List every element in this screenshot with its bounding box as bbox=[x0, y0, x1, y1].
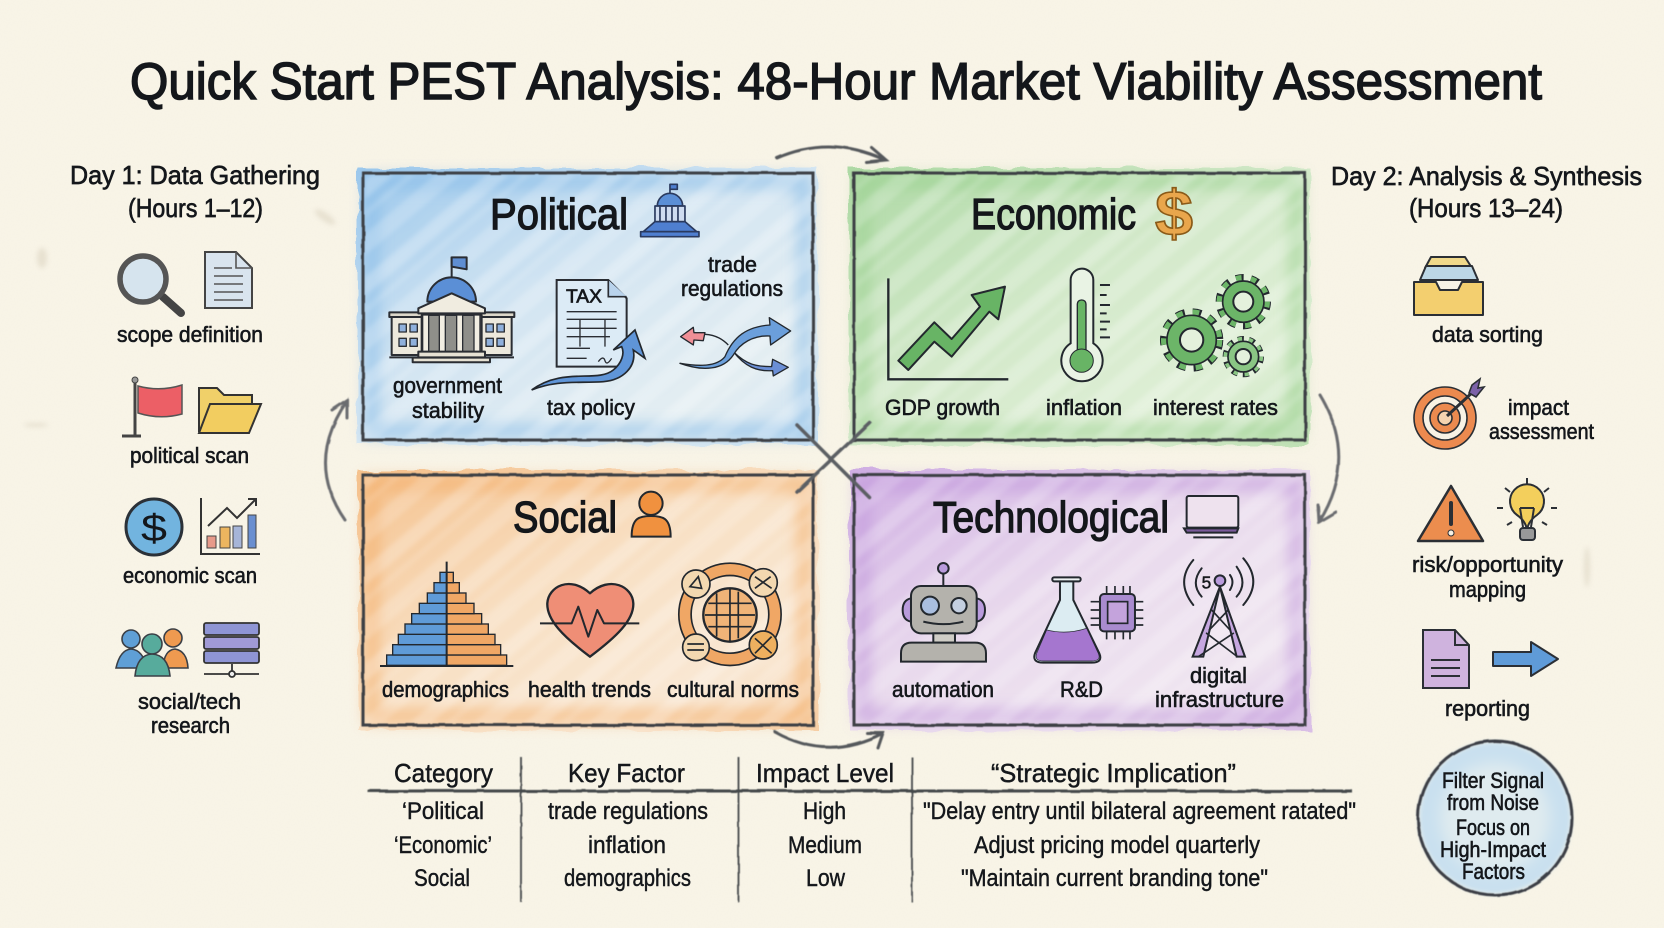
left column: day 1 data gathering bbox=[70, 160, 320, 738]
callout: filter signal from noise bbox=[1418, 741, 1572, 895]
label: trade regulations: regulations bbox=[681, 276, 783, 301]
label: social/tech research: social/tech bbox=[138, 689, 241, 714]
right column: day 2 analysis bbox=[1331, 161, 1642, 721]
icon: blue arrow bbox=[1493, 642, 1558, 676]
icon: government building bbox=[389, 257, 514, 362]
table row: political bbox=[402, 798, 1356, 825]
label: inflation: inflation bbox=[1046, 395, 1122, 420]
icon: warning triangle bbox=[1418, 486, 1483, 541]
table row: political: "Delay entry until bilateral agreement ratated" bbox=[923, 798, 1356, 825]
callout text: Factors bbox=[1462, 859, 1525, 884]
icon: server stack bbox=[204, 623, 259, 677]
table header row: Impact Level bbox=[756, 758, 894, 788]
icon: person bbox=[632, 492, 671, 537]
callout text: Focus on bbox=[1456, 815, 1530, 840]
table row: social bbox=[414, 865, 1268, 892]
icon: gears bbox=[1165, 279, 1266, 373]
label: trade regulations bbox=[681, 252, 783, 301]
table row: social: Low bbox=[806, 865, 846, 892]
label: digital infrastructure: digital bbox=[1190, 663, 1247, 688]
table row: social: Social bbox=[414, 865, 470, 892]
economic border bbox=[854, 173, 1305, 440]
icon: tax document with arrow: TAX bbox=[566, 286, 603, 307]
icon: growth chart bbox=[888, 278, 1008, 379]
cross connector in the centre bbox=[797, 423, 870, 498]
technological wash bbox=[849, 470, 1310, 730]
icon: cultural norms wheel bbox=[682, 569, 777, 661]
icon: population pyramid bbox=[380, 562, 513, 666]
day 1 heading bbox=[70, 160, 320, 223]
label: social/tech research bbox=[138, 689, 241, 738]
political wash bbox=[358, 168, 818, 445]
icon: gold dollar: $ bbox=[1155, 177, 1193, 249]
table row: economic bbox=[394, 832, 1260, 859]
icon: document bbox=[205, 252, 252, 308]
day 2 heading: (Hours 13–24) bbox=[1409, 193, 1563, 223]
table row: political: ‘Political bbox=[402, 798, 484, 825]
label: demographics: demographics bbox=[382, 677, 509, 702]
label: impact assessment: assessment bbox=[1489, 419, 1594, 444]
label: risk/opportunity mapping bbox=[1412, 552, 1563, 602]
callout text: Filter Signal bbox=[1442, 768, 1544, 793]
icon: flask and chip bbox=[1034, 577, 1143, 663]
icon: red flag bbox=[122, 377, 182, 436]
day 1 heading: Day 1: Data Gathering bbox=[70, 160, 320, 190]
icon: 5g tower: 5 bbox=[1202, 572, 1211, 592]
table row: political: High bbox=[803, 798, 846, 825]
icon: report document bbox=[1423, 630, 1469, 688]
label: trade regulations: trade bbox=[708, 252, 757, 277]
icon: 5g tower bbox=[1184, 558, 1253, 657]
social border bbox=[363, 475, 813, 725]
callout text: High-Impact bbox=[1440, 837, 1546, 862]
icon: target with dart bbox=[1414, 379, 1484, 449]
economic heading: Economic bbox=[971, 190, 1136, 239]
political border bbox=[363, 173, 813, 440]
panel: technological bbox=[849, 470, 1310, 730]
label: government stability: stability bbox=[412, 398, 484, 423]
label: impact assessment bbox=[1489, 395, 1594, 444]
table row: economic: ‘Economic’ bbox=[394, 832, 492, 859]
label: cultural norms: cultural norms bbox=[667, 677, 799, 702]
political heading: Political bbox=[490, 190, 628, 239]
arrow: bottom cycle bbox=[775, 732, 883, 748]
icon: light bulb bbox=[1497, 478, 1557, 540]
table rules bbox=[368, 757, 1352, 902]
icon: people group bbox=[116, 629, 188, 676]
title: Quick Start PEST Analysis: 48-Hour Market Viability Assessment bbox=[130, 53, 1543, 111]
label: interest rates: interest rates bbox=[1153, 395, 1278, 420]
label: tax policy: tax policy bbox=[547, 395, 635, 420]
arrow: right cycle bbox=[1318, 395, 1339, 522]
label: digital infrastructure: infrastructure bbox=[1155, 687, 1284, 712]
callout text: from Noise bbox=[1447, 790, 1539, 815]
label: scope definition: scope definition bbox=[117, 322, 263, 347]
icon: small bar chart bbox=[201, 498, 260, 554]
panel: social bbox=[358, 470, 818, 730]
icon: laptop bbox=[1184, 496, 1238, 537]
label: health trends: health trends bbox=[528, 677, 651, 702]
icon: capitol small bbox=[641, 184, 699, 237]
label: impact assessment: impact bbox=[1508, 395, 1569, 420]
label: economic scan: economic scan bbox=[123, 563, 257, 588]
table row: social: demographics bbox=[564, 865, 691, 892]
icon: magnifying glass bbox=[120, 256, 181, 313]
label: risk/opportunity mapping: risk/opportunity bbox=[1412, 552, 1563, 577]
icon: dollar coin bbox=[126, 499, 182, 555]
icon: tax document with arrow bbox=[532, 280, 645, 390]
arrow: left cycle bbox=[325, 400, 347, 520]
table header row: “Strategic Implication” bbox=[991, 758, 1236, 788]
icon: robot bbox=[901, 563, 986, 662]
table row: economic: Medium bbox=[788, 832, 862, 859]
table header row bbox=[394, 758, 1236, 788]
icon: dollar coin: $ bbox=[141, 508, 167, 550]
icon: heart with pulse bbox=[540, 584, 639, 657]
table header row: Key Factor bbox=[568, 758, 685, 788]
panel: political bbox=[358, 168, 818, 445]
label: risk/opportunity mapping: mapping bbox=[1449, 577, 1526, 602]
icon: folder bbox=[199, 388, 261, 433]
label: digital infrastructure bbox=[1155, 663, 1284, 712]
label: government stability bbox=[393, 373, 502, 423]
table row: economic: Adjust pricing model quarterly bbox=[974, 832, 1260, 859]
label: government stability: government bbox=[393, 373, 502, 398]
label: r&d: R&D bbox=[1060, 677, 1103, 702]
day 2 heading bbox=[1331, 161, 1642, 223]
icon: file tray bbox=[1414, 257, 1483, 315]
callout text bbox=[1440, 768, 1546, 884]
social wash bbox=[358, 470, 818, 730]
label: data sorting: data sorting bbox=[1432, 322, 1543, 347]
label: reporting: reporting bbox=[1445, 696, 1530, 721]
table header row: Category bbox=[394, 758, 493, 788]
table row: economic: inflation bbox=[588, 832, 666, 859]
label: automation: automation bbox=[892, 677, 994, 702]
table row: social: "Maintain current branding tone" bbox=[961, 865, 1268, 892]
arrow: top cycle bbox=[777, 147, 886, 162]
social heading: Social bbox=[513, 493, 617, 542]
label: social/tech research: research bbox=[151, 713, 230, 738]
label: gdp growth: GDP growth bbox=[885, 395, 1000, 420]
economic wash bbox=[849, 168, 1310, 445]
callout disc bbox=[1418, 741, 1572, 895]
table: pest summary bbox=[368, 757, 1356, 902]
technological border bbox=[854, 475, 1305, 725]
label: political scan: political scan bbox=[130, 443, 249, 468]
technological heading: Technological bbox=[933, 493, 1169, 542]
day 2 heading: Day 2: Analysis & Synthesis bbox=[1331, 161, 1642, 191]
panel: economic bbox=[849, 168, 1310, 445]
icon: thermometer bbox=[1061, 269, 1110, 381]
table row: political: trade regulations bbox=[548, 798, 708, 825]
day 1 heading: (Hours 1–12) bbox=[128, 193, 263, 223]
icon: trade arrows bbox=[680, 318, 791, 376]
